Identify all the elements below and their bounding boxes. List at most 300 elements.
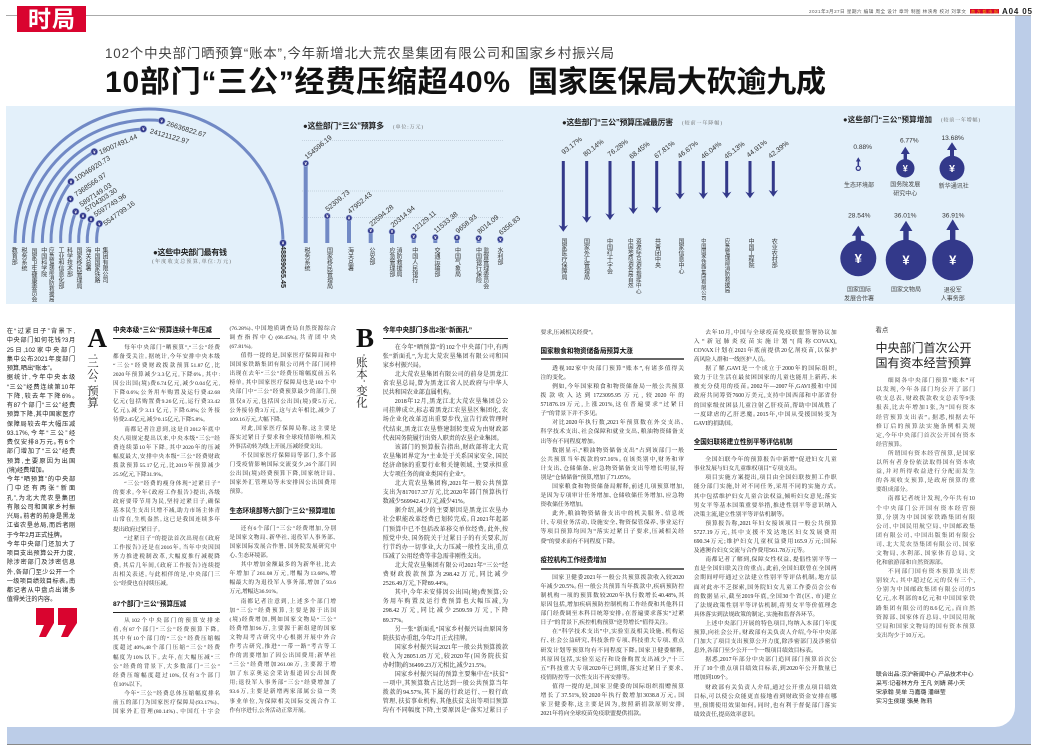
sidebar text: 团有限公司、中国出版集团有限公	[876, 533, 975, 539]
arrow values: 46.04%	[700, 141, 723, 161]
bar icons: ¥	[326, 214, 329, 218]
section B column 1 text: 压减了公用经费等非急需非刚性支出。	[383, 554, 482, 560]
section B column 3 lower text: 事业发展与妇女儿童维权项目”专项支出。	[694, 466, 798, 472]
section B column 2 upper text: 计、专项业务活动、设施安全、物资保管保养、事业运行	[540, 520, 684, 526]
intro text: 江省农垦总局,而后者刚	[7, 522, 75, 529]
bar values: 20314.94	[390, 205, 417, 229]
sidebar heading: 国有资本经营预算	[876, 356, 972, 370]
section B column 1 text: 据介绍,减少的主要原因是黑龙江农垦办	[395, 508, 508, 514]
arc values: 5897149.03	[79, 182, 113, 209]
intro text: 集中公布2021年度部门	[7, 356, 75, 363]
section A column 2 lower text	[230, 525, 336, 714]
section B column 1 text: 省农垦总局,曾为黑龙江省人民政府与中华人	[383, 381, 508, 387]
arc department labels: 教育部	[10, 246, 17, 266]
header and charts layer	[6, 6, 1033, 303]
bubble: 国家国际发展合作署: 国家国际	[847, 285, 871, 293]
section A column 1 upper text: 公”经费也在持续压减。	[113, 581, 169, 587]
arrow department labels: 中国国家铁路集团有限公司	[700, 237, 706, 301]
panel: light blue chart background	[6, 106, 1015, 304]
section B column 1 text: 代结束,黑龙江农垦整建制转变成为由财政部	[383, 427, 508, 433]
section A column 2 lower text: 作的需要增加了因公出国费用;新华社	[230, 653, 336, 659]
sidebar text: 修订后的预算法实施条例相关规	[876, 424, 975, 430]
credits: 实习生侯琨 骆昊 陈莉	[876, 699, 932, 705]
rule	[113, 612, 220, 613]
sidebar text: 益,并对所得收益进行分配而发生	[876, 469, 975, 475]
masthead meta line	[809, 7, 1033, 16]
bubble: 国家国际发展合作署: ¥	[855, 251, 863, 266]
arc values: 48889065.45	[279, 246, 288, 288]
section A column 1 upper text: 提出政府过紧日子。	[113, 527, 161, 533]
arrow values: 67.81%	[653, 140, 676, 160]
bar icons: ¥	[499, 237, 502, 242]
bar department labels: 公安部	[368, 247, 375, 266]
section A column 1 upper text: 央八项规定提出以来,中央本级“三公”经	[113, 436, 220, 442]
section A column 2 upper text: 国国家铁路集团有限公司两个部门同样	[230, 362, 336, 368]
section B column 1 text: 社会职能改革经费已划转完成。自2021年起部	[383, 517, 508, 523]
arrow department labels: 中国地质调查局自然	[627, 237, 634, 290]
arc values: 5547799.16	[102, 200, 137, 228]
bar department labels: 消防救援局	[395, 246, 402, 278]
section A column 2 upper text: 落实过紧日子要求和全球疫情影响,相关	[230, 435, 336, 441]
intro text: 今年“晒预算”的中央部	[7, 476, 75, 483]
section B column 3 lower text: 690.34万元;维护妇女儿童权益费用165.9万元;国际	[694, 539, 837, 545]
sidebar text: 资源部、国家体育总局、中国民用航	[876, 615, 975, 621]
arc chart heading	[152, 247, 231, 265]
main title: 国家医保局大砍逾九成	[528, 66, 826, 99]
section B column 1 text: 298.42万元,同比减少2509.59万元,下降	[383, 608, 508, 614]
bubble: 新华通讯社: 13.68%	[942, 135, 964, 142]
arrow values: 68.45%	[628, 141, 651, 161]
bubble: 生态环境部: 生态环境部	[844, 181, 874, 189]
section A column 2 upper text: 调查指挥中心(68.45%),共青团中央	[230, 335, 336, 341]
sidebar text: 所谓国有资本经营预算,是国家	[888, 451, 975, 457]
section B column 1 text: 支出为817017.37万元,比2020年部门预算执行	[383, 490, 508, 496]
section B column 3 lower text: 面对此亦不乏探索,国务院妇女儿童工作委员会公布	[694, 584, 837, 590]
section A column 2 upper text: 出现在去年“三公”经费压缩幅度前五名	[230, 371, 336, 377]
section B column 1 text: 门预算中已不包括改革移交单位经费。此外,按	[383, 527, 508, 533]
arrow department labels: 中国工程院	[747, 237, 754, 269]
section A column 1 lower text: 公”经费的背景下,大多数部门“三公”	[113, 664, 220, 670]
section A column 1 upper text: 工作报告》还是在2016年。当年中央因国	[113, 545, 220, 551]
sidebar text: 个中央部门公开国有资本经营预	[876, 506, 975, 512]
sidebar text: 亿元,水利部的8亿元和中国国家铁	[876, 596, 975, 602]
arc values	[74, 121, 288, 288]
rule	[540, 358, 684, 360]
bubble: 国家国际发展合作署: 发展合作署	[844, 294, 874, 302]
section A column 2 lower text: 加了东京奥运会采访报道因公出国费	[230, 671, 336, 677]
heading: (单位:万元)	[393, 124, 423, 130]
sidebar text: 要组成部分。	[876, 487, 908, 493]
intro text: “三公”经费连续第10年	[7, 384, 75, 390]
section B column 3 lower text: 南都记者了解到,保障女性权益、提倡性别平等一	[705, 557, 837, 563]
section A column 1 lower text: 国家外汇管理(80.14%)、中国红十字会	[113, 709, 220, 715]
section B column 2 lower text: 疫情防控等一次性支出不再安排等。	[540, 675, 630, 681]
section B column 1 text: 费财政拨款预算为298.42万元,同比减少	[383, 572, 508, 578]
credits: 宋承翰 吴单 马嘉璐 潘继莹	[876, 690, 946, 696]
intro text: 25日,102家中央部门	[7, 346, 75, 354]
bar department labels: 税务系统	[303, 246, 310, 272]
sidebar text: 经营预算。	[876, 442, 903, 448]
section A column 2 upper text: 算仅8万元,包括因公出国(境)费5万元,	[230, 399, 336, 405]
section B column 3 lower text: 直是全国妇联关注的重点。此前,全国妇联曾在全国两	[694, 566, 837, 572]
rule	[540, 568, 684, 570]
section B column 2 lower text: 增长了37.51%,较2020年执行数增加3038.8万元。国	[540, 693, 684, 699]
bubble: 生态环境部: 0.88%	[853, 144, 872, 151]
section B column 3 lower text: 增加到109个。	[694, 675, 728, 681]
intro text: 门中还有两张“新面	[7, 485, 75, 492]
sidebar text: 空局和国家文物局的国有资本预算	[876, 624, 975, 630]
section B column 3 lower text: 绩效责任,提高效率意识。	[694, 712, 756, 718]
section B column 3 lower text: 能分部门实施,针对不同任务,采用不同的实施方式。	[694, 484, 837, 490]
bubble: 生态环境部	[844, 144, 874, 189]
sidebar text: 收支总表、财政拨款收支总表等9张	[876, 396, 975, 402]
bar values: 11533.38	[433, 211, 460, 235]
bar values: 6356.83	[498, 215, 522, 237]
section tag	[17, 6, 86, 32]
masthead rule	[6, 15, 1031, 16]
arc department labels: 应急管理部消防救援局	[48, 246, 54, 303]
bar icons	[303, 160, 503, 242]
main title: 10部门“三公”经费压缩超40%	[105, 66, 510, 99]
sidebar label: 看点	[876, 327, 888, 334]
section A column 2 lower text: 幅最大的为退役军人事务部,增加了93.6	[230, 580, 336, 586]
intro text: 中央部门如何花钱?3月	[7, 337, 75, 344]
section A column 1 upper text: 务力推进税制改革,大幅度推行减税降	[113, 554, 220, 560]
section B column 2 lower text: 国家卫健委2021年一般公共预算拨款收入较2020	[552, 575, 684, 581]
section A column 1 upper text: 每年中央部门“晒预算”,“三公”经费	[124, 345, 220, 351]
section B column 3 lower text: 预算,向社会公开。财政部有关负责人介绍,今年中央部	[694, 630, 837, 636]
sidebar text: 的各项收支预算,是政府预算的重	[876, 478, 975, 484]
section B column 2 upper text: 资收储任务增加。	[540, 502, 584, 508]
arc values: 24121122.97	[149, 128, 190, 146]
arcs	[15, 109, 283, 243]
bubble: 国务院发展研究中心: 研究中心	[893, 190, 917, 198]
intro text: 预算下降,其中国家医疗	[7, 411, 75, 418]
section B column 2 lower text: 制机构一项的预算数较2020年执行数增长40.48%,其	[540, 593, 684, 599]
arrow values: 46.67%	[677, 140, 700, 160]
section A column 2 upper text: 109.16万元,大幅下降。	[230, 417, 283, 423]
sidebar text: 别较大。其中超过亿元的仅有三个,	[876, 578, 975, 584]
intro text: 部门增加了“三公”经费	[7, 448, 75, 455]
section B column 2 lower text: 五”科技重大专项2020年已到期,落实过紧日子要求、	[540, 666, 684, 672]
section B column 3 upper text: 据了解,GAVI是一个成立于2000年的国际组织,	[705, 366, 837, 372]
bubble: 国务院发展研究中心: 6.77%	[900, 137, 919, 144]
arrow department labels: 共青团中央	[654, 237, 660, 269]
intro text: 值得关注的内容。	[7, 596, 53, 603]
arrow values: 80.14%	[582, 138, 605, 159]
section B column 3 lower text: 财政部有关负责人介绍,通过公开重点项目绩效	[705, 685, 837, 691]
section B column 2 upper text	[540, 365, 684, 545]
section B column 2 lower text: 在“科学技术支出”中,实验室及相关设施、机构运	[552, 629, 684, 635]
section B heading 4: 全国妇联将建立性别平等评估机制	[694, 438, 793, 446]
section B column 2 upper text: 等项目预算均因为“落实过紧日子要求,压减相关经	[540, 529, 684, 535]
main title	[105, 66, 826, 99]
bar values: 12129.11	[411, 210, 438, 234]
sidebar text: 南都记者统计发现,今年共有10	[888, 496, 975, 502]
arc end icons: ¥	[98, 221, 101, 226]
arc department labels: 中国科学院	[40, 246, 47, 278]
section B column 1 text: 家乡村振兴局。	[383, 363, 422, 369]
section A column 1 upper text: 政府要带节用为民,坚持过紧日子,确保	[113, 499, 220, 505]
section A column 2 upper text: 央部门中“三公”经费预算最少的部门,预	[230, 389, 336, 395]
section B column 3 lower text: 男女平等基本国策重要举措,推进性别平等意识纳入	[694, 503, 837, 509]
section A column 2 lower text: 还有6个部门“三公”经费增加,分别	[241, 526, 336, 532]
section B column 2 upper text: 子”的背景下并不多见。	[540, 411, 598, 417]
section A column 2 lower text: 用;退役军人事务部“三公”经费增加了	[230, 680, 336, 686]
section A column 2 upper text: 值得一提的是,国家医疗保障局和中	[241, 353, 336, 359]
arrow department labels: 国家医疗保障局	[560, 238, 567, 281]
sidebar text: 司、北大荒农垦集团有限公司、国家	[876, 542, 975, 548]
section A column 1 upper text: 因公出国(境)费6.74亿元,减少0.04亿元,	[113, 381, 220, 387]
arrow department labels	[560, 237, 777, 301]
section B column 3 upper text: 去年10月,中国与全球疫苗免疫联盟签署协议加	[705, 330, 837, 336]
section B column 3 lower text: 项目实施方案提出,项目由全国妇联按照工作职	[705, 475, 837, 481]
section B column 2 upper text: 注的变化。	[540, 375, 567, 381]
section B heading 3: 疫控机构工作经费增加	[540, 556, 606, 564]
section B column 1 text: 数减少569942.41万元,减少41%。	[383, 499, 466, 505]
section B column 3 lower text: 的数据显示,截至2019年底,全国30个省(区、市)建立	[694, 594, 837, 600]
section B column 3 lower text: 及港澳台妇女交流与合作费用561.78万元等。	[694, 548, 805, 554]
section B column 2 lower text: 2021年将向全球疫苗免疫联盟提供捐款。	[540, 711, 642, 717]
section B column 1 text: 其中,今年未安排因公出国(境)费预算;公	[395, 590, 508, 596]
sidebar text: 支出均少于10万元。	[876, 633, 926, 639]
section B column 3 lower text: 全国妇联今年的预算报告中新增“促进妇女儿童	[705, 457, 837, 463]
section A column 1 upper text: 下降0.6%;公务用车购置及运行费42.68	[113, 390, 220, 396]
arc department labels: 海关总署	[84, 246, 91, 272]
bubble: 国家文物局: ¥	[902, 253, 910, 268]
bubble: 国务院发展研究中心: ¥	[903, 164, 908, 174]
section B marker: B	[356, 323, 374, 353]
bar department labels: 中国人民银行	[411, 246, 418, 284]
intro text: 据统计,今年中央本级	[7, 374, 75, 381]
section A column 1 upper text: 南都记者注意到,这是自2012年底中	[124, 427, 220, 433]
section A column 2 lower text: 作有序进行,公务活动正常开展。	[230, 708, 306, 714]
arrow values: 42.39%	[767, 140, 790, 160]
section B column 1 text: 该部门的预算报告指出,财政部将北大荒	[395, 445, 508, 451]
down arrows	[559, 161, 778, 232]
bar icons: ¥	[434, 235, 437, 240]
section B column 2 lower text: 其原因包括,实验室运行和设备购置支出减少,“十三	[540, 657, 684, 663]
bar department labels: 国家移民管理局	[326, 247, 332, 290]
section A column 1 upper text: 费。其后几年间,《政府工作报告》连续提	[113, 563, 220, 569]
sidebar text: 以所有者身份依法取得国有资本收	[876, 460, 975, 466]
bubble: 国家文物局: 36.01%	[894, 212, 917, 219]
section A heading 3: 生态环境部等六部门“三公”预算增加	[230, 508, 335, 515]
bar department labels: 应急管理部	[388, 246, 395, 278]
arc end icons: ¥	[70, 179, 73, 184]
section A column 1 upper text: 幅度最大,安排中央本级“三公”经费财政	[113, 454, 220, 460]
arrow department labels: 应急管理部消防救援局	[724, 237, 730, 294]
intro text: 于今年2月正式挂牌。	[7, 532, 63, 538]
section B column 1 text: 照党中央、国务院关于过紧日子的有关要求,厉	[383, 536, 508, 542]
bars	[304, 163, 502, 243]
section B column 1 text: 农垦集团界定为“主业处于关系国家安全、国民	[383, 454, 508, 460]
section A column 1 lower text: 在10%以下。	[113, 682, 143, 688]
arc values: 18007491.44	[98, 134, 139, 156]
section B column 2 upper text: 拨款收入达到1723095.95万元,较2020年的	[540, 393, 684, 399]
arc department labels: 工业和信息化部	[57, 247, 64, 290]
bubble: 国务院发展研究中心	[890, 137, 920, 198]
section A column 2 upper text	[230, 325, 336, 495]
intro text: 预算,主要原因为出国	[7, 458, 75, 464]
section B column 1 text: 拨款的94.57%,其下属的行政运行、一般行政	[383, 690, 508, 696]
section A column 1 lower text: 幅度为10%以下。去年,在大幅压减“三	[113, 655, 220, 661]
arc end icons: ¥	[74, 209, 77, 214]
intro text: 外,各部门至少公开一个	[7, 568, 75, 576]
section B column 2 upper text: 是因为专项审计任务增加、仓储收储任务增加、应急物	[540, 493, 684, 499]
section B column 1 text: 一项中,其预算数占比达到一般公共预算当年	[383, 681, 508, 687]
bubble: 退役军人事务部: 退役军	[944, 286, 962, 294]
sidebar text: 定,今年中央部门首次公开国有资本	[876, 433, 975, 439]
credits: 联合出品:京沪新闻中心 产品技术中心	[876, 672, 974, 678]
section A column 1 upper text: 亿元),减少3.11亿元,下降6.8%;公务接	[113, 408, 220, 414]
arc department labels: 集团有限公司	[101, 246, 108, 283]
section A column 1 upper text: 的要求。今年《政府工作报告》提出,各级	[113, 490, 220, 496]
section B column 1 text: 经济命脉的重要行业和关键领域、主要承担重	[383, 463, 508, 469]
section B column 3 lower text: 了法规政策性别平等评估机制,将男女平等价值理念	[694, 603, 837, 609]
section B column 1 text	[382, 343, 508, 714]
section B column 1 text: 均有不同幅度下降,主要原因是“落实过紧日子	[383, 708, 508, 714]
section B column 3 lower text: 门加大了项目支出预算公开力度,除涉密部门及涉密信	[694, 639, 837, 645]
section A column 2 lower text: 年增加了261.08万元,增幅为13.68%,增	[230, 571, 336, 577]
bubble: 退役军人事务部: 人事务部	[941, 294, 965, 302]
section B column 3 lower text: 开了10个重点项目绩效目标表,到2020年公开数量已	[694, 666, 837, 672]
section B column 1 text: 北大荒农垦集团有限公司的前身是黑龙江	[395, 372, 508, 378]
section A column 2 lower text: 万元,增幅达36.91%。	[230, 589, 279, 595]
arc end icons: ¥	[142, 127, 145, 132]
section B column 3 lower text: 具体落实到法规政策的制定、实施和监督各环节。	[694, 612, 815, 618]
heading	[562, 117, 722, 127]
section B column 2 upper text: 透视102家中央部门预算“账本”,有诸多值得关	[552, 366, 684, 372]
section A column 2 upper text: (67.81%)。	[230, 344, 253, 350]
section A column 2 lower text: 心、生态环境部。	[230, 553, 269, 559]
arrow values: 93.17%	[561, 136, 584, 156]
section B column 3 lower text: 息外,各部门至少公开一个一级项目绩效目标表。	[694, 648, 814, 654]
section B column 3 lower text: 预算报告称,2021年妇女接该项目一般公共预算	[705, 521, 837, 527]
rule	[113, 338, 220, 339]
section B column 3 lower text: 目标,可以使公众能更直接地看到财政资金安排在哪	[694, 694, 837, 700]
bar department labels: 中国气象局	[454, 246, 460, 278]
bubble: 国务院发展研究中心: 国务院发展	[890, 180, 920, 188]
bubble: 退役军人事务部: 36.91%	[942, 212, 965, 219]
heading: ●这些部门“三公”预算压减最厉害	[562, 117, 673, 127]
intro text: (境)经费增加。	[7, 467, 45, 474]
sidebar text	[876, 377, 975, 639]
section A column 2 upper text: 不仅国家医疗保障局等部门,多个部	[241, 453, 336, 459]
bubble: 国家文物局: 国家文物局	[891, 286, 921, 294]
section B column 2 lower text: 部门经费调至本科目统筹安排。在普遍要求落实“过紧	[540, 611, 684, 617]
section B column 3 upper text: 的国家级贫困县儿童注射乙肝疫苗,帮助中国战胜了	[694, 403, 837, 409]
sidebar text: 经营预算支出表”。据悉,根据去年	[876, 415, 975, 421]
arc chart heading: (年度收支总预算,单位:万元)	[152, 257, 231, 265]
section A column 1 upper text: 都备受关注。据统计,今年安排中央本级	[113, 354, 220, 360]
section B column 3 lower text: 会期间呼吁通过立法建立性别平等评估机制。地方层	[694, 575, 837, 581]
section B column 1 text: 行节约办一切事业,大力压减一般性支出,重点	[383, 545, 508, 551]
bubble: 退役军人事务部	[932, 212, 973, 302]
section A column 1 upper text: 拨款预算55.17亿元,比2019年预算减少	[113, 463, 220, 469]
chart: budget cuts arrows	[559, 117, 790, 301]
section B column 1 text: 2526.49万元,下降89.44%。	[383, 581, 449, 587]
sidebar heading	[876, 341, 972, 370]
credits	[876, 670, 974, 705]
section B column 1 text: 务用车购置及运行费预算也大幅压减,为	[383, 599, 508, 605]
section B column 3 lower text: 上述中央部门开展的特色项目,均纳入本部门年度	[705, 621, 837, 627]
arc department labels: 国家移民管理局	[75, 247, 82, 290]
chart: three public expenses budget largest	[302, 120, 522, 290]
section B column 2 lower text: 行、社会公益研究、科技条件专项、科技重大专项、重点	[540, 638, 684, 644]
bubble: 新华通讯社: ¥	[949, 163, 955, 175]
section A column 2 lower text: 加“三公”经费预算,主要是源于出国	[230, 608, 336, 614]
arc values: 5597749.96	[93, 193, 128, 219]
arrow department labels: 资源综合调查指挥中心	[635, 237, 642, 294]
heading	[303, 120, 423, 130]
section B column 1 text: 在今年“晒预算”的102个中央部门中,有两	[395, 345, 508, 351]
section A column 1 upper text: 出相关表述。与此相伴的是,中央部门三	[113, 572, 220, 578]
intro text: 93.17%,今年“三公”经	[7, 430, 75, 437]
bar icons: ¥	[391, 229, 394, 234]
section A column 2 upper text: 预算。	[230, 489, 243, 495]
heading: ●这些部门“三公”预算增加	[843, 114, 932, 124]
arc values: 5704303.30	[84, 187, 119, 214]
arrow values: 76.28%	[607, 138, 630, 159]
section A column 2 lower text: 93.6万,主要是新增两家部属公益一类	[230, 689, 336, 695]
section B column 2 lower text: 研发计划等预算均有不同程度下降。国家卫健委解释,	[540, 648, 684, 654]
section A column 2 lower text: 是国家文物局、新华社、退役军人事务部、	[230, 535, 336, 541]
intro text: 预算,晒出“账本”。	[7, 365, 53, 372]
section B column 2 upper text: 出等有不同程度增加。	[540, 439, 596, 445]
section A column 1 lower text: 其中有10个部门的“三公”经费压缩幅	[113, 636, 220, 642]
masthead meta line: A04 05	[1002, 7, 1033, 16]
section A column 1 upper text	[113, 344, 220, 587]
section A column 2 upper text: 公务接待费3万元。这与去年相比,减少了	[230, 408, 336, 414]
section B column 1 text: 国家乡村振兴局的预算主要集中在“扶贫”	[395, 672, 508, 678]
arc end icons: ¥	[282, 241, 285, 246]
section B column 3 lower text: 其中包括维护妇女儿童合法权益,倾听妇女意见;落实	[694, 494, 837, 500]
arc department labels: 科学技术部	[66, 246, 72, 278]
sidebar text: 路集团有限公司的8.6亿元。而自然	[876, 606, 975, 612]
masthead meta line: 南方都市报	[971, 8, 998, 14]
bar icons: ¥	[369, 228, 372, 233]
intro text: 孔”,为北大荒农垦集团	[7, 494, 75, 502]
section B column 3 upper text: 被充分使用的疫苗。2002年—2007年,GAVI援和中国	[694, 384, 837, 390]
arc chart heading: ●这些中央部门最有钱	[153, 247, 227, 257]
intro text: 有87个部门“三公”经费	[7, 402, 75, 409]
section B column 2 upper text: 例如,今年国家粮食和物资储备局一般公共预算	[552, 384, 684, 390]
arrow department labels: 农业农村部	[770, 237, 777, 269]
section A column 1 lower text: 经费压缩幅度超过10%,仅有3个部门	[113, 673, 220, 679]
section B column 1 text: 办时期)的36499.23万元相比,减少21.5%。	[383, 663, 487, 669]
section A column 2 upper text: 门受疫情影响国际交流变少,26个部门因	[230, 462, 336, 468]
section B column 1 text: 另一张“新面孔”国家乡村振兴局由原国务	[395, 627, 508, 633]
section A column 1 upper text: 费连续第10年下降。其中2020年的压减	[113, 445, 220, 451]
intro text	[6, 328, 75, 603]
section B column 3 lower text: 5727.19万元,其中支援不发达地区妇女发展费用	[694, 530, 837, 536]
heading	[843, 114, 980, 124]
bar icons: ¥	[304, 161, 307, 166]
section B column 3 lower text	[694, 456, 837, 718]
intro text: 都记者从中盘点出诸多	[7, 587, 75, 594]
section A column 2 lower text: “三公”经费增加261.08万,主要源于增	[230, 662, 336, 668]
section A column 1 upper text: “三公”经费财政拨款预算51.87亿,比	[113, 363, 220, 369]
section B column 1 text: 管理、扶贫事业机构、其他扶贫支出等项目预算	[383, 699, 508, 705]
intro text: 下降,较去年下降6%。	[7, 393, 75, 400]
arrow values	[561, 136, 790, 161]
section B column 2 upper text: 571876.19万元,上涨201%,这在普遍要求“过紧日	[540, 402, 684, 408]
section B column 1 text: 张“新面孔”,为北大荒农垦集团有限公司和国	[383, 354, 508, 360]
section B column 1 text: 北大荒农垦集团称,2021年一般公共预算	[395, 481, 508, 487]
section A column 2 upper text: 对此,国家医疗保障局称,这主要是	[241, 426, 336, 432]
section B column 3 upper text: COVAX计划在2021年底前提供20亿剂疫苗,以保护	[694, 348, 837, 354]
